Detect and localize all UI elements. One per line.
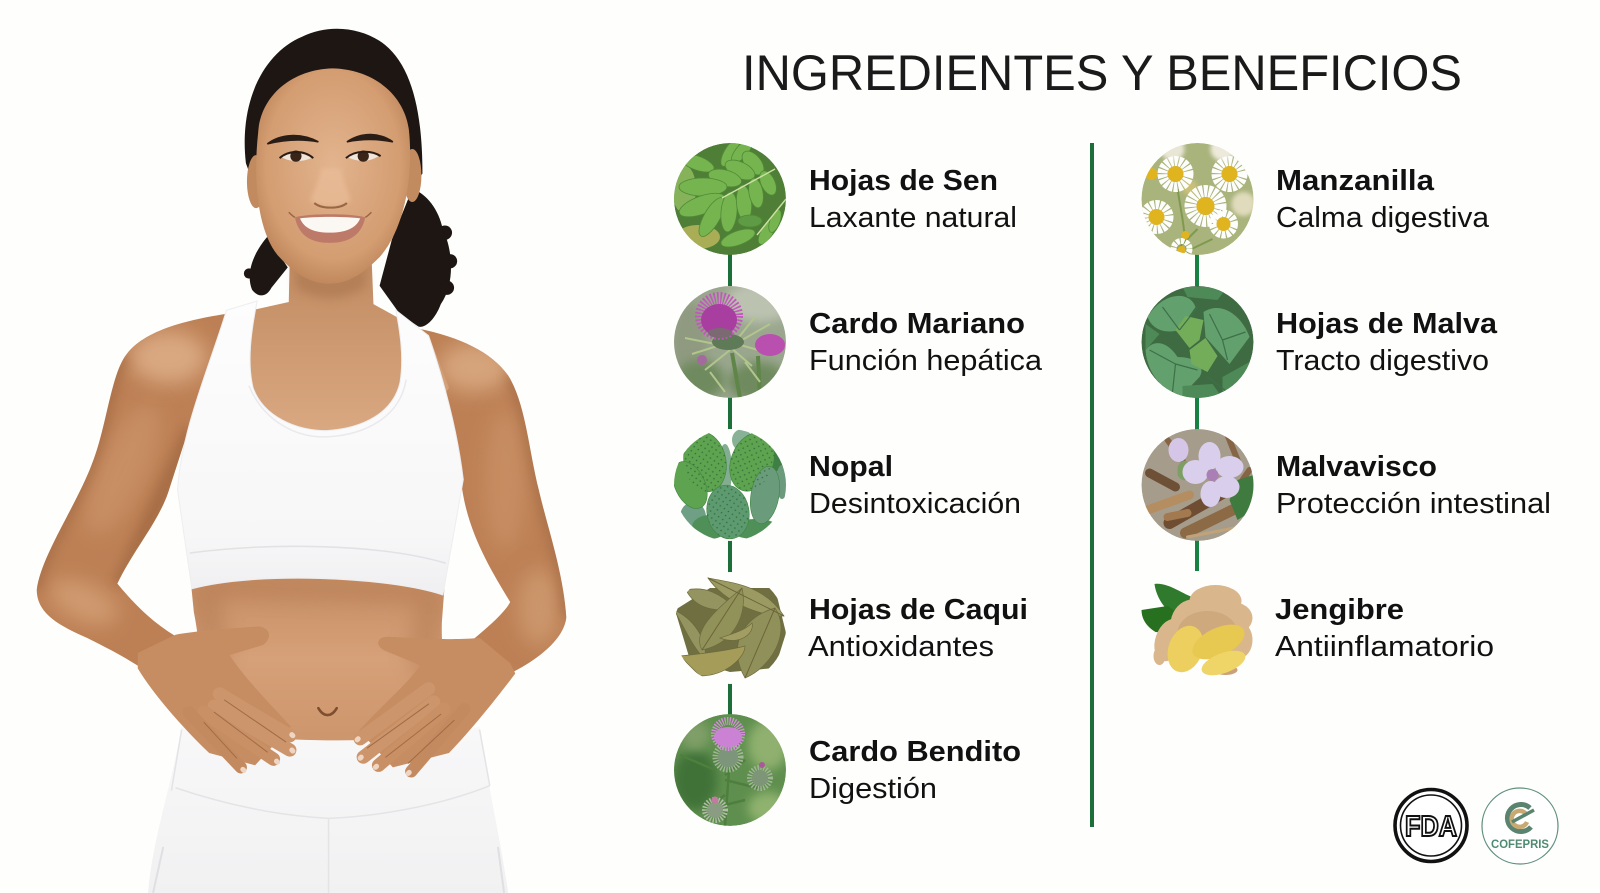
icon: hojas de malva	[1142, 286, 1254, 398]
text: nopal	[809, 451, 1021, 520]
white sports bra	[178, 301, 463, 595]
icon: hojas de caqui	[674, 572, 786, 684]
text: cardo mariano: Cardo Mariano	[809, 308, 1025, 340]
text: hojas de caqui	[808, 594, 1028, 663]
text: jengibre	[1275, 594, 1494, 663]
photo: smiling woman holding her abdomen	[37, 29, 566, 893]
neck and chest	[199, 255, 449, 449]
icon: cardo mariano	[674, 286, 786, 398]
text: hojas de malva: Tracto digestivo	[1276, 345, 1489, 377]
ears	[247, 149, 421, 208]
left arm	[37, 312, 237, 676]
hair	[244, 29, 457, 327]
white leggings	[148, 727, 508, 893]
text: cardo bendito	[809, 736, 1021, 805]
title: INGREDIENTES Y BENEFICIOS	[742, 45, 1462, 101]
text: hojas de malva: Hojas de Malva	[1276, 308, 1498, 340]
text: manzanilla	[1276, 165, 1490, 234]
icon: hojas de sen	[672, 136, 786, 255]
midriff	[182, 571, 480, 745]
text: hojas de sen: Hojas de Sen	[809, 165, 998, 197]
text: hojas de sen	[809, 165, 1017, 234]
text: manzanilla: Calma digestiva	[1276, 202, 1490, 234]
text: hojas de caqui: Hojas de Caqui	[809, 594, 1028, 626]
face	[256, 68, 410, 284]
icon: jengibre	[1142, 584, 1252, 680]
right arm	[418, 329, 566, 694]
right hand	[357, 637, 515, 773]
text: malvavisco: Malvavisco	[1276, 451, 1437, 483]
icon: malvavisco	[1142, 429, 1254, 541]
logo: COFEPRIS	[1482, 788, 1558, 864]
panel: right ingredient column	[1142, 137, 1551, 680]
connector lines left	[728, 254, 732, 715]
icon: manzanilla	[1142, 137, 1256, 257]
text: cardo mariano: Función hepática	[809, 345, 1043, 377]
left hand	[138, 627, 293, 770]
logo: COFEPRIS: COFEPRIS	[1491, 839, 1549, 851]
icon: cardo bendito	[673, 714, 788, 826]
text: manzanilla: Manzanilla	[1276, 165, 1435, 197]
text: nopal: Desintoxicación	[809, 488, 1021, 520]
logo: FDA	[1395, 790, 1467, 862]
center divider	[1090, 143, 1094, 827]
logo: FDA: FDA	[1405, 811, 1457, 843]
text: cardo bendito: Cardo Bendito	[809, 736, 1021, 768]
abdomen shading	[192, 581, 444, 672]
text: cardo mariano	[809, 308, 1043, 377]
text: jengibre: Jengibre	[1275, 594, 1404, 626]
text: cardo bendito: Digestión	[809, 773, 937, 805]
text: hojas de malva	[1276, 308, 1498, 377]
icon: nopal	[674, 429, 786, 541]
connector lines right	[1195, 254, 1199, 571]
panel: left ingredient column	[666, 136, 1043, 826]
navel	[318, 708, 337, 715]
text: malvavisco: Protección intestinal	[1276, 488, 1551, 520]
facial features	[267, 135, 393, 243]
text: malvavisco	[1276, 451, 1551, 520]
text: hojas de caqui: Antioxidantes	[808, 631, 994, 663]
text: jengibre: Antiinflamatorio	[1275, 631, 1494, 663]
text: nopal: Nopal	[809, 451, 893, 483]
text: hojas de sen: Laxante natural	[809, 202, 1017, 234]
neck shadow	[296, 263, 365, 298]
